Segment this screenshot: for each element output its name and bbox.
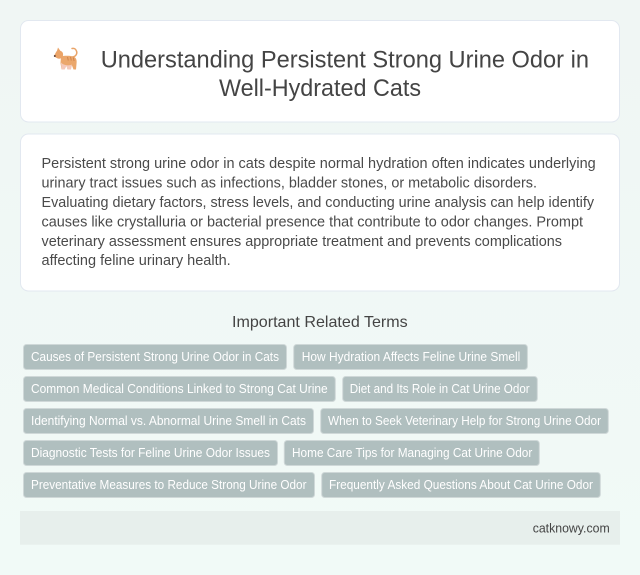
chip: normal vs abnormal: Identifying Normal vs. Abnormal Urine Smell in Cats [31,414,306,428]
chip: causes [24,344,286,370]
summary text block: Persistent strong urine odor in cats despite normal hydration often indicates underlying [42,156,596,172]
summary text block: affecting feline urinary health. [42,253,231,269]
chip: medical conditions: Common Medical Conditions Linked to Strong Cat Urine [31,382,328,396]
summary text block: causes like crystalluria or bacterial presence that contribute to odor changes. Prompt [42,214,583,230]
heading: important related terms: Important Related Terms [232,314,408,331]
chip: home care: Home Care Tips for Managing Cat Urine Odor [292,446,532,460]
chip: hydration: How Hydration Affects Feline Urine Smell [302,350,520,364]
chip: veterinary help: When to Seek Veterinary Help for Strong Urine Odor [328,414,601,428]
title: Well-Hydrated Cats [219,75,421,102]
summary text block: veterinary assessment ensures appropriate treatment and prevents complications [42,234,562,250]
summary text block: urinary tract issues such as infections, bladder stones, or metabolic disorders. [42,176,537,192]
summary text block [42,156,596,269]
chip: diagnostic tests [24,440,278,466]
chip: preventative measures [24,472,314,498]
summary text block: Evaluating dietary factors, stress levels, and conducting urine analysis can help identify [42,195,595,211]
panel: header card [20,20,620,122]
chip: faq: Frequently Asked Questions About Cat Urine Odor [329,478,593,492]
chip: normal vs abnormal [24,408,314,434]
chip: faq [322,472,600,498]
panel: summary card [20,134,620,291]
chip: diet [343,376,537,402]
chip: diet: Diet and Its Role in Cat Urine Odor [350,382,530,396]
title [101,46,589,102]
chip: veterinary help [321,408,608,434]
chip: home care [284,440,539,466]
chip: hydration [294,344,527,370]
panel: related term chips [24,344,608,498]
footer credit: catknowy.com [533,521,610,535]
chip: preventative measures: Preventative Measures to Reduce Strong Urine Odor [31,478,306,492]
chip: diagnostic tests: Diagnostic Tests for Feline Urine Odor Issues [31,446,270,460]
chip: medical conditions [24,376,335,402]
title: Understanding Persistent Strong Urine Odor in [101,46,589,73]
chip: causes: Causes of Persistent Strong Urine Odor in Cats [31,350,279,364]
footer bar [20,511,620,545]
icon: orange cat [54,48,77,70]
